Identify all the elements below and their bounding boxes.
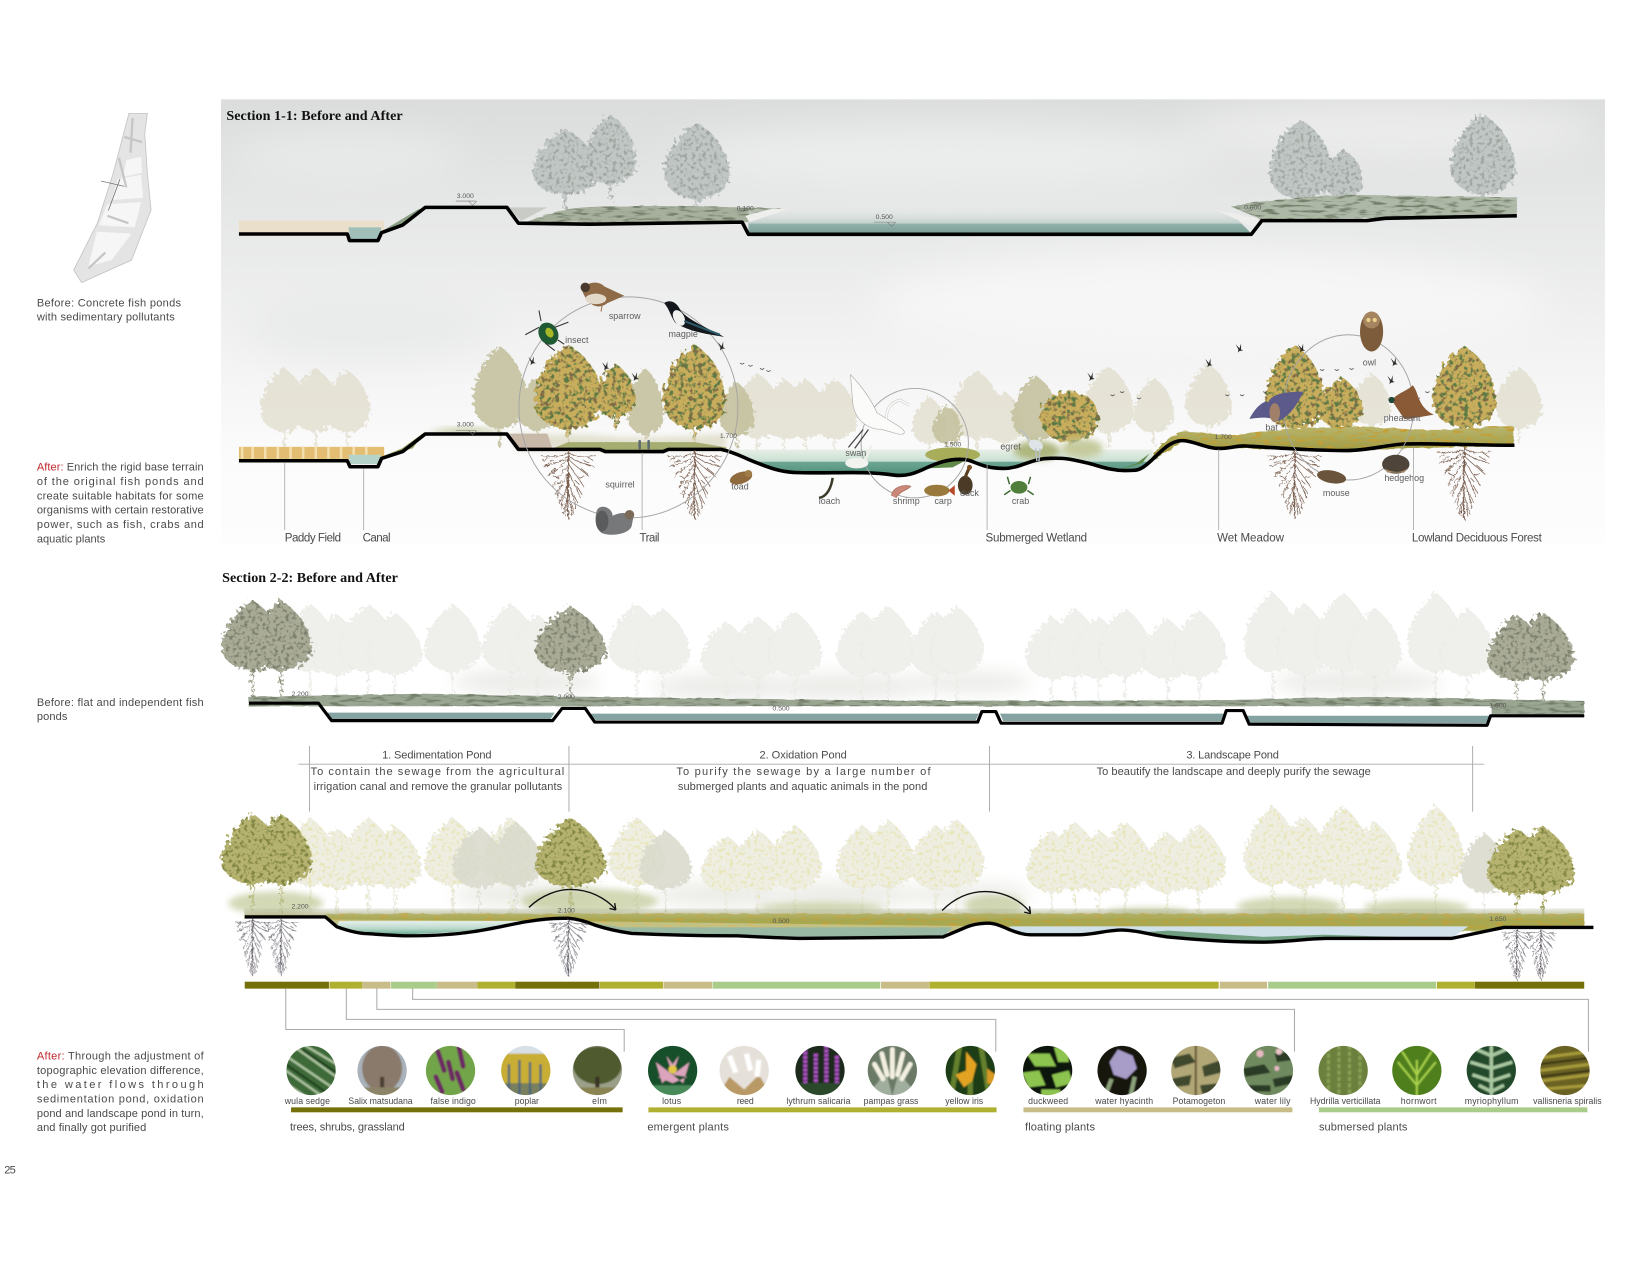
after section: ground line	[245, 917, 1593, 942]
stage 1: sedimentation pond: 1. Sedimentation Pond	[382, 749, 492, 761]
wetland reeds and mounds	[925, 439, 1149, 471]
animal name labels: magpie	[668, 329, 698, 339]
before section: trees	[533, 115, 1515, 218]
plant group bars	[291, 1107, 1587, 1112]
trail meadow	[513, 434, 726, 449]
left note: section 1 before: with sedimentary pollutants	[36, 312, 175, 324]
elevation marks before: 0.100	[737, 206, 754, 213]
slope grass	[381, 207, 426, 232]
wetland water	[726, 449, 1153, 475]
plant photo: duckweed	[1023, 1046, 1072, 1096]
animal: toad	[728, 469, 754, 487]
left note: section 1 after: aquatic plants	[37, 533, 106, 545]
left note: section 2 after	[37, 1050, 205, 1134]
animal name labels: insect	[565, 335, 589, 345]
animal: crab	[1004, 477, 1034, 495]
canal water before	[348, 227, 381, 239]
animal name labels: mouse	[1323, 488, 1350, 498]
left note: section 2 after: the water flows through	[37, 1079, 204, 1091]
after section: elevation marks: 2.200	[291, 903, 309, 910]
before section: elevation marks: 1.600	[1489, 702, 1507, 709]
animal: sparrow	[581, 283, 624, 312]
plant name labels: poplar	[515, 1096, 539, 1106]
animal: bat	[1249, 392, 1303, 422]
plant photo: potamogeton	[1171, 1046, 1220, 1096]
section 1-1 heading: Section 1-1: Before and After	[226, 108, 403, 124]
animal: mouse	[1316, 468, 1347, 486]
animal: hedgehog	[1382, 455, 1409, 474]
stage 2: oxidation pond	[676, 749, 931, 793]
animal name labels	[565, 311, 1424, 506]
plant name labels: wula sedge	[284, 1096, 330, 1106]
left note: section 1 after: create suitable habitats for some	[37, 490, 204, 502]
elevation marks before: 3.000	[457, 193, 474, 200]
left note: section 2 before: ponds	[37, 711, 68, 723]
page number: 25	[4, 1165, 16, 1177]
plant name labels: reed	[737, 1096, 754, 1106]
before section: ground line	[249, 703, 1584, 725]
animal name labels: swan	[845, 448, 866, 458]
habitat labels: Wet Meadow	[1217, 533, 1285, 545]
after section: foreground gold trees	[534, 345, 1496, 457]
after section: foreground trees	[222, 814, 1574, 921]
left note: section 2 before: Before: flat and independent fish	[37, 697, 204, 709]
plant name labels: duckweed	[1028, 1096, 1068, 1106]
plant photo: myriophyllum	[1466, 1046, 1516, 1096]
animal: magpie	[664, 301, 724, 337]
animal: great white egret in flight	[848, 375, 909, 448]
stage 2: oxidation pond: To purify the sewage by a large number of	[676, 766, 931, 778]
plant photo: poplar	[501, 1046, 550, 1096]
before section: elevation marks: 2.200	[291, 691, 309, 698]
stage 3: landscape pond: To beautify the landscape and deeply purify the sewage	[1097, 766, 1371, 778]
plant photo: water lily	[1244, 1046, 1294, 1096]
paddy field before	[239, 221, 384, 233]
concrete edge	[745, 208, 1263, 226]
panel: section 1-1 before and after	[221, 99, 1605, 545]
after section: elevation marks: 1.650	[1489, 916, 1507, 923]
animal name labels: shrimp	[893, 496, 920, 506]
left note: section 2 after: topographic elevation difference,	[37, 1065, 204, 1077]
after section: fog	[453, 882, 1032, 907]
animal name labels: toad	[731, 481, 749, 491]
animal: shrimp	[892, 486, 911, 498]
canal water after	[348, 455, 381, 464]
connector lines from colour bar to plant groups	[286, 988, 1588, 1052]
ground line after	[239, 434, 1514, 475]
left note: section 1 after	[37, 462, 204, 545]
before section: ponds	[320, 706, 1492, 723]
elevation marks before: 0.000	[1244, 204, 1261, 211]
plant photo: lotus	[648, 1046, 698, 1096]
after section: pale background trees	[261, 364, 1542, 455]
left note: section 1 after: power, such as fish, crabs and	[37, 519, 204, 531]
plant photo: wula sedge	[286, 1046, 336, 1096]
plant name labels: elm	[592, 1096, 607, 1106]
plant name labels: water lily	[1254, 1096, 1291, 1106]
elevation marks before	[456, 193, 1261, 226]
animal name labels: carp	[934, 496, 952, 506]
after section: ponds	[337, 921, 1468, 942]
plant group names: submersed plants	[1319, 1122, 1408, 1134]
after section: terrain and water	[239, 426, 1514, 475]
after section: terrain mask	[245, 917, 1593, 974]
before section: ground strip	[248, 694, 1584, 716]
stage 3: landscape pond	[1097, 749, 1371, 778]
plant name labels	[284, 1096, 1602, 1106]
habitat labels: Submerged Wetland	[986, 533, 1087, 545]
after section: pale trees	[284, 806, 1464, 917]
animal: squirrel	[596, 507, 634, 535]
wet meadow and forest floor	[1145, 426, 1514, 465]
animal: owl	[1360, 312, 1383, 352]
animal name labels: loach	[819, 496, 840, 506]
ecological food-web rings	[519, 297, 1414, 518]
people on trail	[638, 440, 650, 449]
plant group names: emergent plants	[647, 1122, 729, 1134]
stage 2: oxidation pond: 2. Oxidation Pond	[759, 749, 847, 761]
pond stage brackets	[298, 746, 1484, 812]
animal: duck	[958, 465, 973, 495]
panel: section 2-2 before and after	[37, 570, 1593, 980]
elevation marks after: 1.500	[944, 441, 961, 448]
after section: grey mid trees	[452, 822, 1508, 917]
plant name labels: pampas grass	[864, 1096, 919, 1106]
after section: meadow band	[244, 908, 1584, 931]
stage 1: sedimentation pond: irrigation canal and remove the granular pollutants	[314, 781, 563, 793]
before section: elevation marks: 0.500	[773, 706, 790, 713]
left note: section 2 after: After: Through the adjustment of	[37, 1050, 205, 1062]
pond water before	[748, 208, 1251, 233]
animal name labels: bat	[1265, 423, 1278, 433]
before section: fog	[453, 669, 1442, 699]
left note: section 2 after: sedimentation pond, oxidation	[37, 1094, 204, 1106]
tree roots	[541, 446, 1492, 520]
left note: section 2 before	[37, 697, 204, 723]
island grass right	[1231, 195, 1517, 220]
animal name labels: crab	[1012, 496, 1029, 506]
before section: foreground trees	[222, 600, 1574, 707]
plant group names	[290, 1122, 1408, 1134]
habitat labels: Canal	[363, 533, 391, 545]
habitat leader lines	[285, 446, 1413, 530]
plant photo: hydrilla verticillata	[1318, 1046, 1368, 1096]
after section: mid-tone trees	[473, 346, 1059, 455]
water flow arrow 2	[942, 892, 1031, 914]
left note: section 1 before: Before: Concrete fish ponds	[37, 297, 182, 309]
elevation marks before: 0.500	[876, 214, 893, 221]
left note: section 1 after: organisms with certain restorative	[37, 505, 204, 517]
left note: section 2 after: pond and landscape pond in turn,	[37, 1108, 204, 1120]
plant name labels: lotus	[662, 1096, 682, 1106]
before section: pale trees	[284, 593, 1494, 703]
left note: section 1 after: After: Enrich the rigid base terrain	[37, 462, 204, 474]
plant zone colour bar	[245, 982, 1584, 989]
habitat labels: Trail	[639, 533, 659, 545]
plant name labels: hornwort	[1401, 1096, 1437, 1106]
plant group names: floating plants	[1025, 1122, 1095, 1134]
after section: grass tufts	[228, 888, 1468, 916]
paddy field after	[239, 447, 384, 459]
stage 1: sedimentation pond	[311, 749, 564, 793]
stage 2: oxidation pond: submerged plants and aquatic animals in the pond	[678, 781, 927, 793]
plant photo: false indigo	[426, 1046, 476, 1096]
after section: tree roots	[236, 918, 1556, 980]
after section: elevation marks	[291, 903, 1507, 925]
plant name labels: water hyacinth	[1094, 1096, 1153, 1106]
left note: section 1 after: of the original fish ponds and	[37, 476, 204, 488]
animal: small egret	[1019, 429, 1045, 461]
section 2-2 heading: Section 2-2: Before and After	[222, 570, 398, 586]
plant name labels: Potamogeton	[1173, 1096, 1225, 1106]
flying birds	[528, 342, 1429, 399]
plant name labels: lythrum salicaria	[786, 1096, 851, 1106]
animal: loach	[819, 478, 833, 498]
stage 1: sedimentation pond: To contain the sewage from the agricultural	[311, 766, 564, 778]
animal name labels: hedgehog	[1384, 473, 1424, 483]
sky background	[221, 99, 1605, 544]
plant name labels: false indigo	[431, 1096, 476, 1106]
clouds	[232, 105, 1600, 358]
before section: elevation marks: 2.000	[558, 694, 575, 701]
left note: section 1 before	[36, 297, 182, 324]
left note: section 2 after: and finally got purified	[37, 1122, 146, 1134]
animal name labels: owl	[1363, 357, 1376, 367]
terrace grass	[428, 428, 505, 434]
animal name labels: egret	[1000, 441, 1021, 451]
water flow arrow 1	[529, 889, 616, 910]
island grass left	[526, 206, 781, 222]
habitat labels: Lowland Deciduous Forest	[1412, 533, 1543, 545]
stage 3: landscape pond: 3. Landscape Pond	[1186, 749, 1279, 761]
plant group names: trees, shrubs, grassland	[290, 1122, 405, 1134]
before section: terrain and water	[239, 195, 1517, 241]
plant name labels: Hydrilla verticillata	[1310, 1096, 1381, 1106]
animal: swan	[845, 445, 872, 468]
plant photo: hornwort	[1392, 1046, 1442, 1096]
plant name labels: vallisneria spiralis	[1533, 1096, 1602, 1106]
plant name labels: Salix matsudana	[348, 1096, 413, 1106]
animal: insect	[525, 311, 568, 351]
habitat labels: Paddy Field	[285, 533, 341, 545]
animal: pheasant	[1388, 385, 1434, 419]
animal name labels: duck	[960, 488, 979, 498]
plant photo: vallisneria spiralis	[1540, 1046, 1590, 1096]
animal: carp	[924, 485, 955, 496]
elevation marks after: 1.700	[720, 433, 737, 440]
elevation marks after: 3.000	[457, 421, 474, 428]
plant name labels: yellow iris	[945, 1096, 984, 1106]
site plan key map	[74, 113, 151, 283]
after section: elevation marks: 0.500	[773, 918, 790, 925]
elevation marks after	[456, 421, 1232, 448]
habitat labels	[285, 533, 1543, 545]
animal name labels: squirrel	[605, 479, 635, 489]
animal name labels: pheasant	[1384, 413, 1421, 423]
plant photo: pampas grass	[868, 1046, 917, 1096]
elevation marks after: 1.700	[1215, 434, 1232, 441]
after section: elevation marks: 2.100	[558, 908, 575, 915]
ground line before	[239, 207, 1517, 241]
plant photo: reed	[720, 1046, 769, 1096]
plant photo: lythrum salicaria	[795, 1046, 845, 1096]
before section: elevation marks	[291, 691, 1507, 713]
plant photo: salix matsudana	[358, 1046, 407, 1096]
plant photo: elm	[572, 1046, 622, 1096]
animal name labels: sparrow	[609, 311, 641, 321]
plant photo: water hyacinth	[1098, 1046, 1147, 1096]
plant photo: yellow iris	[946, 1046, 995, 1096]
plant name labels: myriophyllum	[1465, 1096, 1518, 1106]
